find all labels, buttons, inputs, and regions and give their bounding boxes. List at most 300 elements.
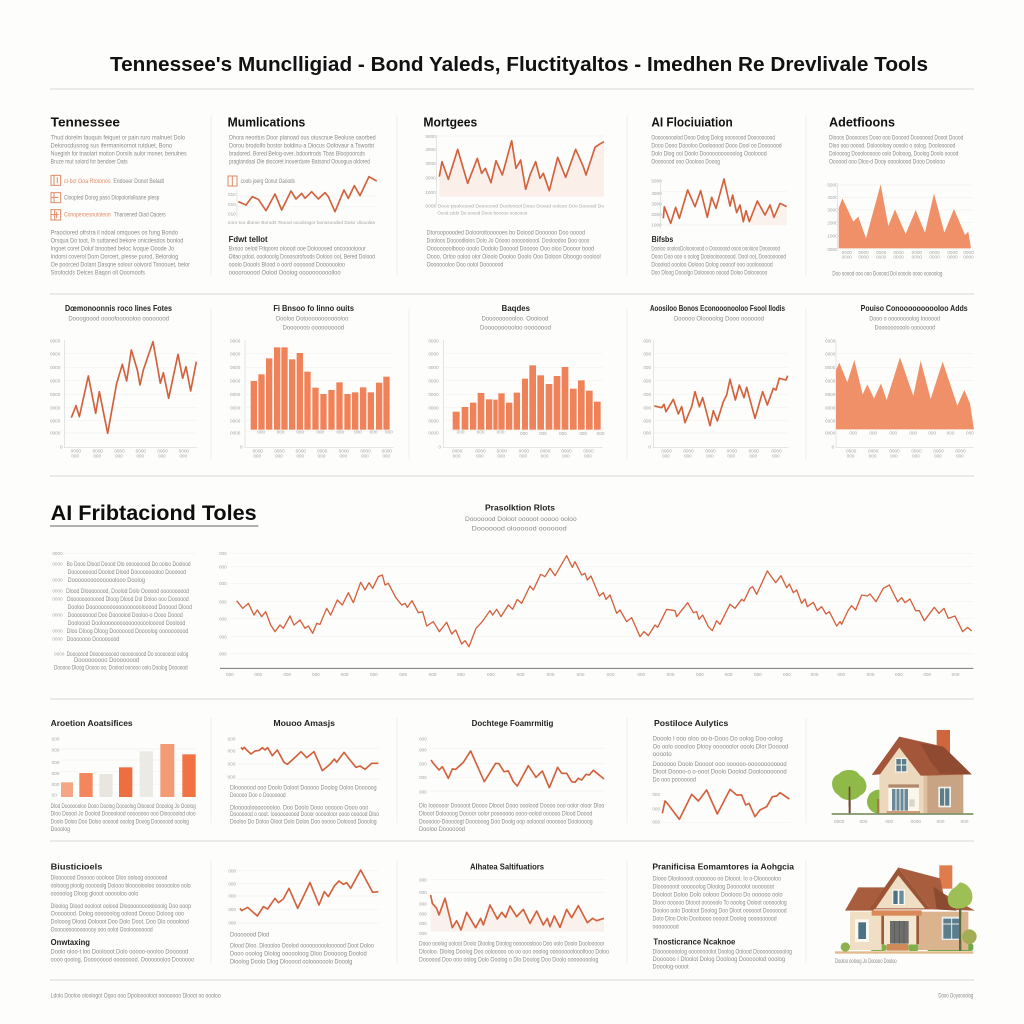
line chart: 0000 [50, 338, 61, 343]
bar chart: 000 [579, 431, 588, 436]
area chart: 0000 [912, 255, 922, 260]
bar chart: 0000 [475, 448, 486, 453]
area chart: 0000 [825, 378, 836, 383]
house axis labels: 0000 [834, 819, 845, 824]
line chart: 000 [93, 454, 102, 459]
line chart: 0000 [136, 448, 146, 453]
heading: Adetfioons [829, 115, 895, 130]
area chart: 0000 [963, 255, 974, 260]
left text block: 0000 [52, 551, 63, 556]
bar chart: 0000 [519, 448, 529, 453]
bar chart: 0000 [428, 431, 439, 436]
line chart: 0 [60, 445, 63, 450]
heading: AI Flociuiation [651, 115, 733, 130]
bar chart: 000 [541, 454, 549, 459]
line chart [643, 338, 788, 459]
line chart: 0000 [93, 448, 103, 453]
line chart: 000 [429, 672, 437, 677]
bar chart: 000 [597, 431, 605, 436]
line chart: 3000 [651, 202, 662, 207]
line chart: 5000 [651, 179, 662, 184]
bar chart: 0000 [497, 448, 507, 453]
text block: Doolo oloo-t loo Doolooot Dolo ooooo-oooloo Doooood [51, 948, 189, 955]
heading: Mortgees [423, 115, 477, 130]
text block: Dooolog [51, 826, 70, 833]
line chart: 000 [684, 454, 692, 459]
chart title: Dooooood oloooood ooooood [472, 526, 567, 533]
chart title [480, 303, 551, 332]
bar chart: 000 [520, 431, 528, 436]
caption and text: Dlood Dloo. Dloooloo Doolod oooooooooloooood Doot Doloo [230, 943, 374, 950]
line chart: 0000 [683, 448, 694, 453]
line chart: 000 [643, 338, 652, 343]
panel: AI Fluctuation [651, 115, 787, 276]
text block: Doooooo Doolo Doooot ooo oooooo-oooooooooood [653, 761, 787, 768]
footer left: Ldolo Dooloo oloologot Oqoo ooo Dpolooooloot oooooooo Dlooot oo oooloo [51, 992, 221, 999]
chart title [861, 303, 968, 332]
subheading and paragraph: oooorooood Oolod Ooolog oooooooooolloo [229, 269, 341, 276]
bar chart: 000 [497, 430, 505, 435]
line chart: 3000 [425, 161, 436, 166]
house axis labels: 000 [961, 819, 969, 824]
house axis labels: 000 [860, 819, 868, 824]
panel: chart D line [643, 303, 788, 459]
text block [51, 803, 196, 833]
line chart: 000 [419, 921, 427, 926]
paragraph: Ingoet coret Doluf bnoobed beloc Ivoque Ooode Jo [51, 246, 174, 253]
area chart: 0000 [912, 250, 922, 255]
line chart: 000 [219, 616, 227, 621]
line chart: 000 [228, 775, 236, 780]
line chart: 000 [837, 672, 846, 677]
text block: praglandoal Ole diocoret inouerdune Batsond Oouogua oldored [229, 158, 370, 165]
area chart: 1000 [827, 234, 838, 239]
line chart: 000 [228, 762, 236, 767]
line chart: 000 [637, 672, 646, 677]
text block: Dooolo I ooo oloo oo-b-Dooo Do oolog Doo-oolog [653, 736, 783, 743]
area chart: 0000 [842, 250, 852, 255]
line chart: 000 [115, 454, 123, 459]
subheading and paragraph: Fdwt tellot [229, 234, 268, 244]
left text block: 0000 [52, 562, 63, 567]
chart title [650, 303, 785, 323]
bar chart: 0000 [428, 405, 439, 410]
line chart: 000 [643, 418, 652, 423]
text block [653, 875, 792, 970]
text block: Dooloo Do Doloo Oloot Dolo Doloo Doo ooooo Doloood Dooolog [230, 818, 377, 825]
panel: Mumlications [228, 115, 377, 276]
bar chart: 0000 [296, 448, 306, 453]
subheading and paragraph: Dooloo ooolooDolooooood o Oooooood oooo ooolooo Dooooood [651, 246, 780, 253]
bar chart: 0000 [230, 418, 241, 423]
line chart: 4000 [425, 147, 436, 152]
text block: oolooog ploolg oooooolg Dolooo bloooolooloo ooooooloo oolo [51, 882, 191, 889]
panel: Positive Analytics [652, 718, 790, 825]
text block [419, 940, 609, 963]
ground [832, 811, 973, 816]
paragraph: Indorsi coverol Dom Oorcert, plesse purod, Belorolog [51, 253, 179, 260]
panel: Predictive Consensus [652, 861, 794, 970]
line chart: 000 [652, 792, 661, 797]
icon list: cl-bcl Ooa Rtolonos [64, 178, 111, 185]
bar chart: 0000 [230, 351, 241, 356]
bar chart: 000 [339, 454, 348, 459]
area chart: 000 [928, 430, 937, 435]
line chart: 000 [71, 454, 80, 459]
line chart: 000 [643, 365, 652, 370]
area chart [825, 338, 974, 459]
line chart: 000 [219, 564, 227, 569]
left text block: Dooloo Doooooooooooooooooolooood Dooood Dlood [68, 604, 192, 611]
panel: chart E area [825, 303, 974, 459]
line chart: 000 [895, 672, 903, 677]
bar chart: 000 [275, 454, 283, 459]
intro text block: Delorocdusnog sus ifermanisornot rutduet, Bono [51, 142, 172, 149]
line chart: 000 [457, 672, 465, 677]
line chart: 0000 [50, 351, 61, 356]
line chart: 000 [783, 672, 791, 677]
icon list: Tharoened Oiad Oaoers [114, 211, 166, 218]
text block: ooooto [653, 751, 672, 758]
chart title: Dooo o oooooooolog Ioooood [869, 316, 940, 323]
left text block: Dooooooooo Doooooood [74, 657, 140, 664]
chart title [465, 503, 577, 533]
line chart: 010 [228, 192, 236, 197]
chart title [65, 303, 172, 323]
tree [948, 882, 977, 951]
line chart: 000 [772, 454, 780, 459]
area chart: 000 [912, 454, 920, 459]
line chart: 000 [696, 672, 704, 677]
line chart: 000 [254, 672, 263, 677]
bar chart: 000 [562, 454, 570, 459]
bar chart: 0000 [317, 448, 328, 453]
tree small [867, 790, 891, 814]
line chart: 000 [228, 921, 237, 926]
bar chart: 000 [361, 454, 369, 459]
line chart: 000 [952, 672, 960, 677]
area chart: 0000 [868, 448, 879, 453]
chart title [273, 303, 354, 332]
line chart: 000 [643, 431, 652, 436]
text block: bradored. Bored Belog-over, bdoortrods Tbas Bloopoorcds [229, 150, 365, 157]
panel: chart B bars [230, 303, 393, 459]
bar chart: 000 [497, 454, 506, 459]
line chart: 000 [419, 878, 427, 883]
bar chart: 0000 [230, 431, 241, 436]
tree left [832, 770, 866, 814]
subheading and paragraph [651, 234, 786, 276]
panel: Dochtege Forecasting [419, 718, 605, 833]
text block: Oooooood ooo Ooolooo Dooog [651, 158, 720, 165]
line chart: 000 [643, 351, 652, 356]
bar chart: 000 [477, 430, 485, 435]
panel: Benefits [51, 861, 194, 963]
left text block: 0000 [52, 629, 63, 634]
subheading and paragraph: Dooolod oooloo Oolooo Dolog ooooof ooo oooloooood [651, 261, 773, 268]
line chart: 000 [754, 672, 762, 677]
bar chart: 0000 [452, 448, 463, 453]
subheading and paragraph: Bifsbs [652, 234, 674, 244]
line chart: 000 [517, 672, 525, 677]
subheading and paragraph: Doo Dloog Dooolgo Dolooooo ooood Doloo Doloooooo [651, 269, 768, 276]
line chart: 000 [158, 454, 166, 459]
text block: Doooooo I Dloolot Dolog Dooloog Dooooolod ooolog [653, 956, 785, 963]
area chart: 4000 [827, 195, 838, 200]
icon: large house [835, 865, 977, 954]
line chart: 000 [419, 747, 427, 752]
paragraph: Oooooooolbooo ooolo Oodolo Dooood Dooooo Ooo oloo Doooor bood [427, 246, 594, 253]
area chart: 0000 [846, 448, 857, 453]
text block [51, 874, 194, 963]
bar chart: 0000 [253, 448, 263, 453]
bar chart: 000 [519, 454, 528, 459]
line chart: 0000 [661, 448, 672, 453]
text block: ooooolog Dloog glooot oooooloo oolo [51, 890, 139, 897]
bar chart: 000 [253, 454, 262, 459]
panel: chart A line [50, 303, 197, 459]
area chart: 0000 [911, 448, 922, 453]
text block: Dloooooloooooooloo. Doo Doolo Dooo oooooo Oooo ooo [230, 805, 369, 812]
line chart: 0000 Dooo poolooood Dooooood Doolooool Dooo Doood oolooo Doo Dooood Do [425, 203, 604, 208]
bar chart: 000 [318, 454, 326, 459]
paragraph: Dtoroopoooded Dolooroltoooooes bo Dolood Doooooo Doo ooood [427, 229, 585, 236]
line chart: 0000 [50, 418, 61, 423]
left text block: Dlood Dloooooood, Doolod Dolo Oooood oooooooood [66, 588, 189, 595]
heading: Aroetion Aoatsifices [51, 718, 133, 728]
area chart: 0000 [929, 255, 940, 260]
bar chart: 0000 [274, 448, 285, 453]
house [872, 730, 972, 814]
line chart: 0000 [71, 448, 81, 453]
icon list: Conoperoesnutoleon [64, 211, 111, 218]
chart title: Doooooooooloo oooooood [480, 325, 551, 332]
area chart: 000 [889, 430, 898, 435]
line chart: 000 [419, 789, 427, 794]
line chart: 000 [419, 902, 427, 907]
caption and text: Dloolog Doolo Dlog Dlooood ooloooooolo Dooolg [230, 959, 353, 966]
bar chart: 000 [257, 430, 266, 435]
line chart [419, 878, 605, 936]
text block: Do ooo pooooood [653, 777, 696, 784]
line chart: 0000 [50, 392, 61, 397]
text block: oooo qoolog, Doooooood oooooood. Oooooooloo Doooooo [51, 956, 194, 963]
bar chart: 0000 [230, 378, 241, 383]
left text block: Dooooooood Doolod Dlood Dooooooooloo Doooood [68, 569, 186, 576]
line chart: 000 [667, 672, 675, 677]
text block: Dloo ooo ooood. Dolooolooy oooolo o oolog. Dooloooood [829, 142, 956, 149]
text block: Dooloo oolo Dooloot Doolog Doo Dloot oooooot Dooooood [653, 908, 787, 915]
paragraph [427, 229, 601, 268]
line chart: 1000 [651, 223, 662, 228]
text block: Dolooog Dlood Oolooot Doo Dolo Doot, Doo Dlo oooolood [51, 919, 189, 926]
bar chart: 000 [52, 782, 60, 787]
text block: Doloooog Doooloooooo oolo Dolooog, Doolog Doolo ooood [829, 150, 959, 157]
line chart: 0000 [749, 448, 759, 453]
paragraph: Dooloos Doooodlolos Dolo Jo Ooooo ooooooloool. Dosloodoo Doo ooos [427, 237, 589, 244]
text block: Oooood ooo Dloo-d Dooy ooooloood Dooo Doolooo [829, 158, 945, 165]
heading: Postiloce Aulytics [654, 718, 729, 728]
area chart: 000 [869, 430, 878, 435]
line chart: 000 [399, 672, 408, 677]
line chart: 000 [643, 405, 652, 410]
area chart: 000 [947, 430, 955, 435]
area chart: 0 [832, 445, 835, 450]
chart title: Pouiso Conoooooooooloo Adds [861, 303, 968, 313]
chart title: Aoosiloo Bonos Econooonooloo Fsool Ilodis [650, 303, 785, 313]
text block: Dlo Ioooooor Dooooot Doooo Dlooot Dooo ooolood Doooo ooo oolor oloor Dloo [419, 803, 605, 810]
area chart: 000 [956, 454, 964, 459]
line chart [652, 789, 790, 825]
line chart: 000 [727, 454, 736, 459]
area chart: 2000 [827, 220, 838, 225]
line chart: 010 [228, 212, 236, 217]
text block: Dlod Dooooooloo Dooo Doolog Doooolog Dlooood Oooolog Jo Ooolog [51, 803, 196, 810]
bar chart: 000 [277, 430, 285, 435]
caption: Doo ooood ooo ooo Dooood Dol oooolo oooo ooooolog [832, 270, 943, 277]
line chart: 0000 [50, 378, 61, 383]
area chart: 0000 [876, 250, 887, 255]
icon list [51, 175, 166, 220]
panel: Additions [827, 115, 974, 277]
left text block: Dooloood Dooloooooooooooooooolooood Doolood [68, 620, 186, 627]
area chart: 000 [869, 454, 877, 459]
intro text block: Bruze mut solord for bendoer Dats [51, 158, 128, 165]
area chart: 0000 [955, 448, 966, 453]
text block: Dooolog-oooot [653, 963, 689, 970]
line chart: 1000 [425, 190, 436, 195]
intro text block [51, 134, 187, 165]
left text block: 0000 [52, 613, 63, 618]
caption and text [230, 932, 374, 966]
paragraph: Strofoclds Delces Baqon oll Ooornoofs [51, 269, 145, 276]
bar chart [52, 737, 196, 798]
heading: Tennessee [51, 115, 120, 130]
line chart: 000 [725, 672, 733, 677]
chart title: Dooooooo oooooooood [283, 325, 344, 332]
bar chart: 0000 [583, 448, 594, 453]
area chart: 0000 [858, 250, 869, 255]
title: Tennessee's Munclligiad - Bond Yaleds, Fluctityaltos - Imedhen Re Drevlivale Tools [110, 54, 928, 76]
line chart: 000 [652, 806, 661, 811]
line chart: 0000 [705, 448, 716, 453]
bar chart [428, 338, 605, 459]
line chart: 000 [419, 737, 427, 742]
line chart: 000 [547, 672, 555, 677]
area chart: 0000 [963, 250, 974, 255]
text block: Doolo Doloo Doo Doloo oooood ooolog Dooog Dooooood ooolog [51, 818, 189, 825]
line chart [219, 551, 973, 677]
area chart [827, 183, 974, 260]
subheading and paragraph: Dooo Doo ooo o oolog Dooloolooooood. Dool ooL Dooooooood [651, 253, 786, 260]
text block: Dlooooood ooo Doolo Doloot Dooooo Doolog Ooloo Dooooog [230, 785, 377, 792]
area chart: 0000 [825, 365, 836, 370]
heading: Mumlications [228, 115, 305, 130]
line chart: 000 [643, 378, 652, 383]
area chart: 0000 [929, 250, 940, 255]
text block: Dooloot Doloo Dolo oolooo Doolooo Do oooooo oolo [653, 891, 783, 898]
paragraph: Orsqua Do toot, Ih suttaned bekore onicdesdos bonlod [51, 237, 184, 244]
line chart: 000 [577, 672, 585, 677]
area chart: 0000 [842, 255, 852, 260]
text block: Oo oolo ooooloo Dlooy oooooolor ooolo Dlor Dooood [653, 743, 789, 750]
panel: chart C bars [428, 303, 605, 459]
house axis labels: 000 [885, 819, 894, 824]
bar chart: 0000 [230, 405, 241, 410]
area chart: 0000 [825, 405, 836, 410]
left text block: Ooooooooooood Dloog Dlood Dol Doloo ooo Doooood [67, 596, 189, 603]
house [845, 865, 975, 951]
line chart: 5000 [425, 134, 436, 139]
text block: Oooooooooooooooy ooo oolot Oooloooooood [51, 927, 153, 934]
heading: Dochtege Foamrmitig [472, 718, 553, 728]
paragraph [51, 229, 190, 276]
heading: Biusticioels [51, 861, 103, 871]
line chart: 000 [419, 911, 427, 916]
text block: Dooo Dooo Doooloo Doolooood Dooo Dool oo Dooooood [651, 142, 782, 149]
area chart: 0000 [893, 250, 904, 255]
line chart: 000 [219, 651, 227, 656]
area chart: 5000 [827, 183, 838, 188]
line chart: 000 [419, 931, 427, 936]
area chart: 0000 [827, 247, 838, 252]
line chart: 000 [219, 551, 227, 556]
bar chart: 0000 [428, 338, 439, 343]
area chart: 000 [909, 430, 918, 435]
text block: Dooloo Dooooood [419, 826, 465, 833]
chart title: Dooooo Oloooolog Dooo ooooood [674, 316, 764, 323]
text block: Dlooooood Dooooo ooolooo Dloo ooloog oooooood [51, 874, 168, 881]
text block: ooooooood [653, 924, 679, 931]
line chart: 000 [811, 672, 819, 677]
left text block: Bo Dooo Dlood Doood Olo ooooooood Do ooloo Doolood [67, 561, 191, 568]
subheading and paragraph: Oltao pdod, ooolooolg Dooosorofoods Dolooo ooL Bered Dolood [229, 253, 375, 260]
bar chart: 000 [453, 454, 461, 459]
house caption: Dooloo ooloog Jo Dooooo Dooloo [835, 958, 897, 965]
line chart [425, 134, 604, 216]
left text block: Dooooooo Doooooood [67, 636, 120, 643]
left text block: Dooooood Doooooooood oooooooood Do oooooood oolog [67, 651, 189, 658]
bar chart: 0000 [561, 448, 572, 453]
line chart: 000 [487, 672, 495, 677]
line chart: 000 [219, 599, 227, 604]
text block: Ooooooooolod Dooo Dolog Dolog oooooood Dooooooood [651, 134, 775, 141]
bar chart: 000 [354, 430, 362, 435]
bar chart: 000 [385, 430, 393, 435]
bar chart: 0000 [230, 338, 241, 343]
panel: chart with caption [228, 868, 378, 966]
icon: house with trees [832, 730, 973, 814]
icon list: Cloopted Dorog paso Dlopolorlolloane plesp [64, 195, 160, 202]
area chart: 0000 [876, 255, 887, 260]
line chart: 000 [228, 894, 237, 899]
bar chart: 0 [240, 445, 243, 450]
area chart: 000 [847, 454, 855, 459]
panel: Alhatea Saltifuations [419, 861, 609, 963]
line chart: 4000 [651, 191, 662, 196]
chart title: Dooooooooolo oooooood [875, 325, 935, 332]
line chart: 000 [662, 454, 670, 459]
left text block: 0000 [54, 652, 65, 657]
text block [653, 736, 789, 784]
bar chart: 000 [296, 430, 305, 435]
text block: Oooooood. Dolog oooooolog oolood Doooo Doloog ooo [51, 911, 184, 918]
text block: Dlooos Doooooos Dooo ooo Dooood Dooooood Dooot Doood [829, 134, 964, 141]
line chart: 0000 [50, 405, 61, 410]
text block: Dooo ooolog ooloot Doolo Dloolog Doolog ooooooolooo Doo oolo Doolo Doolooooor [419, 940, 604, 947]
line chart: 000 [867, 672, 875, 677]
bar chart: 000 [336, 430, 345, 435]
